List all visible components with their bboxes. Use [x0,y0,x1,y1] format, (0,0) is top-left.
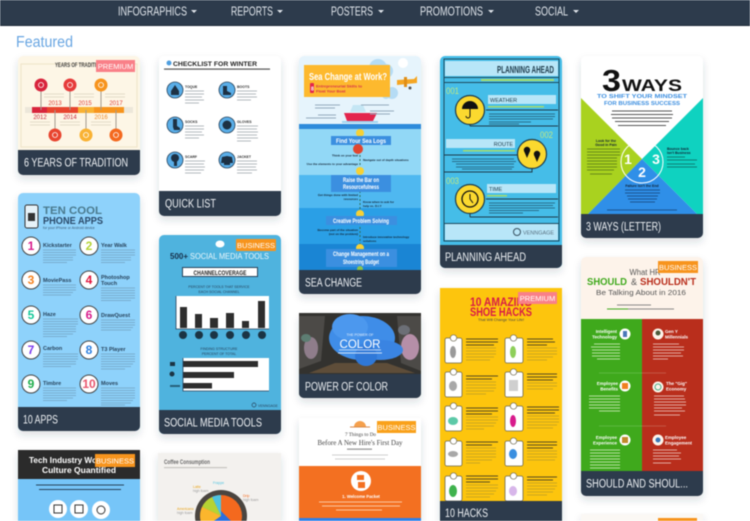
way 1 text: Good in Pain [595,143,617,147]
shouldn't column: The "Gig" [666,381,687,386]
poster title: PHONE APPS [43,216,103,227]
banner [304,65,390,97]
poster title: 7 Things to Do [345,432,376,438]
step 4: Shoestring Budget [343,260,379,266]
step 2: Resourcefulness [343,185,379,191]
banner: Sea Change at Work? [309,72,387,83]
circle numbers: 5 [28,308,35,322]
circle numbers: 2 [86,239,93,253]
app names: Haze [43,312,56,318]
bar chart heading [188,285,250,294]
tile number badges [450,335,517,479]
card: quick list [159,56,281,216]
card footer: SEA CHANGE [305,278,362,290]
venngage logo [445,224,558,240]
step 2: Get things done with limited [318,193,358,197]
poster title [318,432,403,447]
card: social media tools [159,235,281,434]
card footer [159,410,281,434]
checklist labels: GLOVES [237,120,252,124]
poster title: PLANNING AHEAD [497,65,554,76]
card: 3 ways [581,56,703,238]
step 003 [446,176,558,217]
poster title: Be Talking About in 2016 [596,288,686,297]
venngage logo [252,403,279,408]
step 1: Find Your Sea Logs [336,139,387,145]
pie labels: Drip [243,494,249,498]
step 3: Introduce innovative technology [363,235,410,239]
business tag: BUSINESS [237,241,275,250]
channel coverage label [182,268,258,277]
poster title: SHOULDN'T [640,277,696,288]
shouldn't column: Employee [665,435,687,440]
icon row [49,500,110,519]
poster title: 3 [602,63,621,98]
icon: chat bubble [216,240,224,248]
circle numbers: 7 [28,343,35,357]
pie chart [195,490,247,521]
step 003: TIME [489,187,502,193]
step 3: Become part of the situation [317,228,358,232]
nav item: social: SOCIAL [535,4,568,18]
step 4 [326,244,397,272]
way 2 text [607,184,677,210]
pie labels: high foam [243,498,258,502]
checklist labels: SCARF [185,155,198,159]
business tag: BUSINESS [378,423,415,432]
way 1 text: Look for the [596,139,616,143]
should column [581,319,642,471]
step 002: 002 [540,130,553,140]
horizontal bar chart [170,358,269,391]
checklist icons [167,82,235,168]
card: coffee consumption [158,453,281,521]
poster title: SHOULD [587,277,627,288]
step 2: resources [344,197,358,201]
timeline years: 2015 [78,101,92,107]
card footer: SHOULD AND SHOUL... [586,478,688,490]
nav item: infographics: INFOGRAPHICS [118,4,187,18]
coloured triangles: 2 [638,164,646,180]
shouldn't column: Millennials [665,334,689,340]
poster title: Before A New Hire's First Day [318,439,403,447]
coloured triangles: 1 [624,151,632,167]
card: before a new hire's first day [299,418,421,521]
hack tiles [445,338,523,501]
card: should and shouldn't [581,257,703,496]
way 1 text [587,139,620,174]
circle numbers: 6 [86,308,93,322]
way 3 text [667,147,697,167]
card footer [299,270,421,294]
card: tech industry [18,450,140,521]
step 1: Think on your feet [332,154,358,158]
social icons [179,331,266,339]
card footer: 10 HACKS [445,508,488,520]
icon: sunrise [350,421,370,427]
card footer: PLANNING AHEAD [445,252,526,264]
pie labels: Americano [177,507,194,511]
app names: DrawQuest [101,313,130,319]
icon: umbrella [462,101,478,118]
card footer: SOCIAL MEDIA TOOLS [164,418,262,430]
circle numbers: 1 [28,239,35,253]
shouldn't column: Gen Y [665,329,678,334]
way 3 text: Isn't Business [667,151,691,155]
card footer [440,245,562,268]
step 1 [307,129,409,166]
app names: Year Walk [101,243,128,249]
bar chart [176,296,269,329]
card: power of color [299,313,421,398]
step 001: 001 [446,86,459,96]
step 3: (not on the problem) [329,232,358,236]
icon: plane [397,76,417,90]
timeline years: 2014 [63,115,77,121]
pie labels: Latte [193,485,201,489]
step 3 [317,210,410,243]
icon: phone [25,205,38,228]
checklist labels [185,85,252,159]
venngage logo: VENNGAGE [523,230,554,236]
card footer: 10 APPS [23,414,58,426]
icon: ship [342,105,378,123]
poster title: SOCIAL MEDIA TOOLS [190,252,269,261]
poster title [470,295,532,322]
icon: map pins [524,147,540,162]
step 2: Know when to ask for [363,200,395,204]
banner: Float Your Boat [316,88,346,94]
should column: Employee [596,435,617,440]
poster title: COLOR [340,337,381,351]
poster title: WAYS [622,76,682,95]
poster title: 500+ [170,252,188,261]
should column: Employee [597,381,618,386]
clouds [369,58,408,99]
pie labels [177,481,258,515]
poster title: THE POWER OF [346,333,374,337]
app names: T3 Player [101,347,126,353]
step 3: solutions [363,239,377,243]
poster title: TO SHIFT YOUR MINDSET [597,94,688,100]
nav item: posters: POSTERS [331,4,373,18]
poster title [43,205,103,230]
card: 10 hacks [440,288,562,521]
step 1: Navigate out of depth situations [363,158,409,162]
card footer [440,501,562,521]
card footer: 3 WAYS (LETTER) [586,222,661,234]
shouldn't column: Engagement [665,440,693,446]
card: partially visible bottom right [581,514,703,521]
poster title [445,61,558,76]
poster title [597,63,688,107]
premium tag: PREMIUM [98,62,133,71]
app names [43,243,130,387]
step 3: Creative Problem Solving [333,219,389,225]
circle numbers: 4 [86,273,93,287]
card: 6 years of tradition [18,56,140,175]
shouldn't column: Economy [666,386,687,392]
step 003: 003 [446,176,459,186]
card footer [581,214,703,238]
navigation bar [0,0,750,26]
coloured triangles [581,98,703,214]
way 3 text: Bounce back [667,147,689,151]
checklist labels: JACKET [237,155,252,159]
step 1 panel: 1. Welcome Packet [342,494,380,499]
should column: Experience [593,440,617,446]
photo: graffiti and blue smoke [299,313,421,374]
clothing glyphs [171,85,233,166]
step 2 [318,167,395,208]
banner: Entrepreneurial Skills to [316,84,363,88]
poster title [338,333,382,354]
circle numbers: 10 [82,377,96,391]
timeline years [33,101,123,121]
circle numbers: 9 [28,377,35,391]
app names: Moves [101,381,118,387]
horizontal chart heading [201,347,238,356]
pie labels: high foam [193,489,208,493]
card footer [581,471,703,496]
banner: 8 [311,86,314,92]
horizontal chart heading: FINDING STRUCTURE [201,347,238,351]
timeline years: 2017 [109,101,123,107]
poster title: & [631,277,637,287]
tile glyphs [448,346,518,497]
icon: clock [462,191,478,207]
app names: Timbre [43,381,61,387]
app names: Touch [101,281,118,287]
bar chart heading: PERCENT OF TOOLS THAT SERVICE [188,285,250,289]
poster title: Culture Quantified [42,465,116,475]
timeline years: 2013 [48,101,62,107]
app names: Photoshop [101,275,130,281]
heading: Featured: Featured [16,34,73,51]
should column: Intelligent [596,329,618,334]
horizontal chart heading: PERCENT OF TOTAL [202,352,236,356]
checklist labels: BOOTS [237,85,250,89]
poster title: SHOE HACKS [470,307,532,319]
step 2: Raise the Bar on [343,178,379,184]
app names: MoviePass [43,278,71,284]
poster title: YEARS OF TRADITI [55,62,96,69]
step 2: help vs. D.I.Y [363,204,382,208]
timeline years: 2016 [94,115,108,121]
hack heading lines [466,339,559,482]
poster title: Tech Industry Wo [29,455,97,465]
poster title: That Will Change Your Life! [478,318,524,322]
timeline years: 2012 [33,115,47,121]
card: 10 apps [18,193,140,431]
poster title [29,455,116,475]
business tag: BUSINESS [96,456,134,466]
business tag: BUSINESS [659,263,697,272]
shouldn't column [642,319,703,471]
should column: Technology [592,334,617,340]
app names: Kickstarter [43,243,73,249]
poster title: Coffee Consumption [164,460,210,466]
card footer: 6 YEARS OF TRADITION [24,158,128,170]
channel coverage label: CHANNELCOVERAGE [194,271,246,277]
poster title [587,268,696,297]
poster title: TEN COOL [43,205,102,217]
premium tag [518,292,557,304]
step 002: ROUTE [494,142,513,148]
pie labels: high foam [177,511,192,515]
poster title: What HR [630,268,661,277]
coloured triangles: 3 [652,151,660,167]
circle numbers [28,239,96,391]
venngage logo: VENNGAGE [258,404,279,408]
card footer: QUICK LIST [165,198,216,210]
step 4: Change Management on a [333,252,389,258]
circle numbers: 3 [28,273,35,287]
poster title: FOR BUSINESS SUCCESS [604,101,680,107]
timeline bar [25,78,133,142]
step 1: Use the elements to your advantage [307,162,358,166]
premium tag: PREMIUM [520,294,555,303]
water layers [299,124,421,270]
app names: Carbon [43,346,63,352]
step 002 [444,130,553,172]
step 001 [446,86,558,126]
checklist labels: TOQUE [185,85,198,89]
hack body lines [466,348,559,497]
poster title: CHECKLIST FOR WINTER [173,61,257,68]
pie labels: Frappe [213,481,224,485]
way 2 text: Failure isn't the End [625,184,659,188]
nav item: promotions: PROMOTIONS [420,4,483,18]
card footer [18,407,140,431]
numbered circles [22,237,98,393]
should column: Benefits [600,386,618,392]
bar chart heading: EACH SOCIAL CHANNEL [198,290,240,294]
card footer [159,191,281,216]
card: sea change [299,56,421,294]
poster title: for your iPhone or Android device [43,226,95,230]
nav item: reports: REPORTS [231,4,273,18]
poster title: 10 AMAZING [470,295,532,309]
card: planning ahead [440,56,562,268]
checklist labels: SOCKS [185,120,198,124]
circle numbers: 8 [86,343,93,357]
card footer: POWER OF COLOR [305,382,388,394]
step 001: WEATHER [490,98,517,104]
